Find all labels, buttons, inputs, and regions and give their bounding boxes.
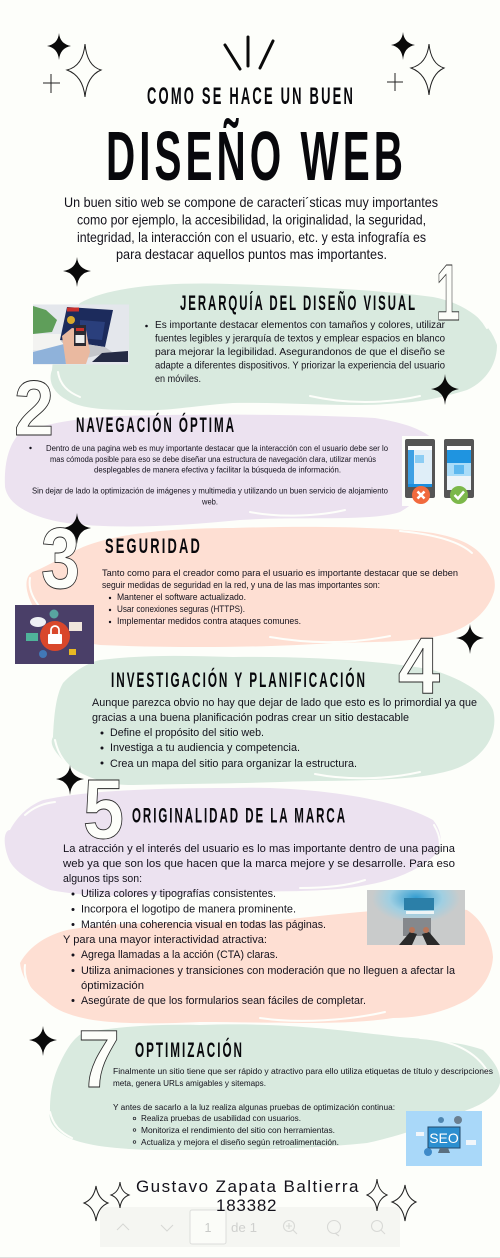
text: investigacion: Investiga a tu audiencia y competencia.	[110, 742, 300, 754]
footer toolbar	[100, 1207, 400, 1247]
heading: optimizacion: OPTIMIZACIÓN	[135, 1038, 244, 1062]
intro text: para destacar aquellos puntos mas importantes.	[116, 246, 387, 262]
panel: blob investigacion	[52, 656, 494, 785]
text: originalidad: Agrega llamadas a la acción (CTA) claras.	[81, 949, 278, 961]
text: originalidad: La atracción y el interés del usuario es lo mas importante dentro de una pagina	[63, 843, 456, 855]
panel: blob originalidad	[5, 788, 441, 896]
text: investigacion: Define el propósito del sitio web.	[110, 727, 264, 739]
text: jerarquia	[145, 319, 445, 385]
icon: star	[456, 624, 484, 654]
text: originalidad: algunos tips son:	[63, 873, 142, 885]
intro text: Un buen sitio web se compone de caracteri´sticas muy importantes	[64, 194, 438, 210]
icon: top left sparkles	[43, 33, 101, 97]
number 7: 7	[78, 1014, 120, 1105]
text: optimizacion	[113, 1066, 494, 1147]
text: optimizacion: Monitoriza el rendimiento del sitio con herramientas.	[141, 1125, 335, 1135]
footer toolbar: 1	[205, 1221, 212, 1235]
text: jerarquia: adapte a diferentes dispositivos. Y priorizar la experiencia del usuario	[155, 360, 445, 372]
panel: blob peach originalidad	[20, 908, 493, 1023]
text: originalidad: Mantén una coherencia visual en todas las páginas.	[81, 919, 326, 931]
icon: star	[63, 513, 91, 544]
text: optimizacion: Finalmente un sitio tiene que ser rápido y atractivo para ello utiliza etiquetas de título y descripciones	[113, 1066, 494, 1076]
text: jerarquia: Es importante destacar elementos con tamaños y colores, utilizar	[155, 319, 445, 331]
number 3: 3	[41, 511, 80, 607]
text: investigacion: Aunque parezca obvio no hay que dejar de lado que esto es lo primordial ya que	[92, 697, 477, 709]
text: navegacion: Dentro de una pagina web es muy importante destacar que la interacción con el usuario debe ser lo	[46, 444, 389, 453]
text: originalidad: óptimización	[81, 980, 144, 992]
text: originalidad: Y para una mayor interactividad atractiva:	[63, 934, 267, 946]
panel: blob optimizacion	[50, 1024, 500, 1150]
text: jerarquia: en móviles.	[155, 373, 201, 385]
image: SEO	[406, 1111, 482, 1166]
icon: star	[56, 765, 84, 795]
text: seguridad: Usar conexiones seguras (HTTPS).	[117, 604, 245, 614]
number 5: 5	[83, 762, 124, 856]
number 1: 1	[436, 248, 460, 337]
text: seguridad: Mantener el software actualizado.	[117, 592, 246, 602]
icon: star	[431, 374, 459, 405]
text: optimizacion: Actualiza y mejora el diseño según retroalimentación.	[141, 1137, 339, 1147]
heading: seguridad: SEGURIDAD	[105, 535, 202, 558]
icon: title rays	[225, 37, 273, 69]
text: navegacion	[29, 444, 389, 506]
text: originalidad	[62, 843, 456, 1007]
text: seguridad: seguir medidas de seguridad en la red, y una de las mas importantes son:	[102, 580, 380, 590]
text: seguridad	[102, 568, 458, 626]
text: navegacion: Sin dejar de lado la optimización de imágenes y multimedia y utilizando un buen servicio de alojamiento	[32, 486, 389, 496]
text: optimizacion: meta, genera URLs amigables y sitemaps.	[113, 1078, 266, 1088]
intro text: integridad, la interacción con el usuario, etc. y esta infografía es	[77, 229, 426, 245]
text: jerarquia: para mejorar la legibilidad. Asegurandonos de que el diseño se	[155, 346, 445, 358]
image: laptop and phone	[33, 304, 129, 364]
panel: blob seguridad	[26, 527, 495, 647]
image: phones	[402, 436, 475, 506]
text: investigacion: gracias a una buena planificación podras crear un sitio destacable	[92, 712, 409, 724]
footer author	[136, 1177, 360, 1215]
number 2: 2	[14, 364, 54, 452]
icon: star	[29, 1026, 57, 1056]
bottom edge	[0, 1257, 500, 1258]
footer author: 183382	[216, 1196, 278, 1215]
text: investigacion	[92, 697, 477, 770]
text: originalidad: Asegúrate de que los formularios sean fáciles de completar.	[81, 995, 366, 1007]
icon: star	[63, 257, 91, 287]
text: seguridad: Implementar medidos contra ataques comunes.	[117, 616, 301, 626]
intro text	[64, 194, 438, 262]
text: optimizacion: Y antes de sacarlo a la luz realiza algunas pruebas de optimización continua:	[113, 1102, 395, 1112]
number 4: 4	[398, 621, 440, 710]
footer author: Gustavo Zapata Baltierra	[136, 1177, 360, 1196]
heading: navegacion: NAVEGACIÓN ÓPTIMA	[76, 413, 236, 437]
icon: footer right sparkles	[367, 1179, 416, 1221]
text: seguridad: Tanto como para el creador como para el usuario es importante destacar que se deben	[102, 568, 458, 578]
text: navegacion: desplegables de manera efectiva y facilitar la búsqueda de información.	[94, 466, 341, 474]
text: navegacion: mas cómoda posible para eso se debe diseñar una estructura de navegación clara, utilizar menús	[50, 455, 376, 464]
text: optimizacion: Realiza pruebas de usabilidad con usuarios.	[141, 1113, 301, 1123]
text: navegacion: web.	[201, 498, 218, 506]
footer toolbar: de 1	[231, 1220, 257, 1235]
image: SEO: SEO	[429, 1130, 459, 1146]
panel: blob navegacion	[5, 415, 437, 526]
panel: blob jerarquia	[51, 284, 497, 410]
text: jerarquia: fuentes legibles y jerarquía de textos y emplear espacios en blanco	[155, 332, 445, 344]
text: originalidad: Incorpora el logotipo de manera prominente.	[81, 904, 296, 916]
intro text: como por ejemplo, la accesibilidad, la originalidad, la seguridad,	[77, 212, 426, 228]
text: originalidad: web ya que son los que hacen que la marca mejore y se desarrolle. Para eso	[62, 858, 455, 870]
image: hands on laptop	[367, 890, 465, 945]
image: security	[15, 605, 94, 664]
text: originalidad: Utiliza colores y tipografías consistentes.	[81, 888, 276, 900]
icon: top right sparkles	[387, 32, 444, 95]
icon: footer left sparkles	[84, 1182, 129, 1221]
text: investigacion: Crea un mapa del sitio para organizar la estructura.	[110, 758, 357, 770]
text: originalidad: Utiliza animaciones y transiciones con moderación que no lleguen a afectar la	[81, 965, 456, 977]
